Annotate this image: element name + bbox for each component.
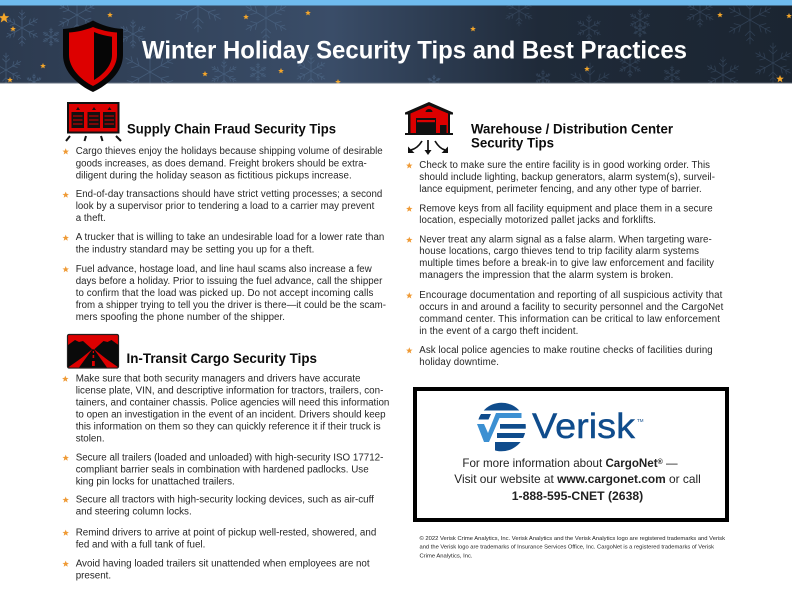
tip list: warehouse: Remove keys from all facility equipment and place them in a secure [419, 204, 713, 214]
icon: container board [66, 103, 121, 141]
heading: supply chain fraud: Supply Chain Fraud Security Tips [127, 122, 336, 136]
tip list: warehouse: house locations, cargo thieves tend to trip facility alarm systems [419, 246, 699, 257]
copyright footnote [420, 535, 725, 560]
tip list: supply chain: the industry standard may be setting you up for a theft. [76, 244, 314, 255]
tip list: supply chain: look by a supervisor prior to tendering a load to a carrier may prevent [76, 201, 375, 212]
tip list: warehouse: lance equipment, perimeter fencing, and any other type of barrier. [419, 184, 702, 195]
tip list: supply chain: days before a holiday. Prior to issuing the fuel advance, call the shipper [76, 276, 383, 287]
heading: warehouse: Warehouse / Distribution Center [471, 122, 674, 136]
contact text [454, 457, 701, 503]
tip list: warehouse: holiday downtime. [419, 357, 499, 368]
icon: shield [63, 20, 123, 92]
tip list: in-transit: present. [76, 570, 111, 582]
tip list: supply chain: A trucker that is willing to take an undesirable load for a lower rate than [76, 232, 384, 243]
tip list: supply chain: from a shipper trying to tell you the driver is there—it could be the scam- [76, 300, 386, 311]
panel: verisk contact box [415, 389, 727, 520]
contact text: ® [658, 458, 664, 466]
tip list: warehouse: Check to make sure the entire facility is in good working order. This [419, 160, 710, 171]
tip list: in-transit: Make sure that both security managers and drivers have accurate [76, 374, 361, 384]
tip list: in-transit: stolen. [76, 434, 105, 444]
tip list: in-transit: and steering column locks. [76, 506, 192, 518]
tip list: in-transit [62, 374, 389, 582]
tip list: in-transit: Remind drivers to arrive at point of pickup well-rested, showered, and [76, 528, 376, 538]
tip list: in-transit: king pin locks for unattached trailers. [76, 476, 235, 488]
tip list: in-transit: license plate, VIN, and descriptive information for tractors, trailers, con- [76, 386, 383, 396]
tip list: supply chain: Cargo thieves enjoy the holidays because shipping volume of desirable [76, 146, 383, 157]
copyright footnote: and the Verisk logo are trademarks of Insurance Services Office, Inc. CargoNet is a registered trademarks of Verisk [420, 544, 714, 550]
tip list: supply chain: diligent during the holiday season as fictitious pickups increase. [76, 170, 352, 181]
contact text: Visit our website at www.cargonet.com or call [454, 472, 701, 486]
contact text: — [663, 457, 678, 470]
icon: road [68, 334, 118, 368]
tip list: in-transit: this information on them so they can quickly reference it if their truck is [76, 422, 381, 432]
icon: warehouse [405, 102, 453, 155]
tip list: warehouse: in the event of a cargo theft incident. [419, 326, 578, 337]
tip list: supply chain: mers spoofing the phone number of the shipper. [76, 312, 285, 323]
tip list: warehouse: Ask local police agencies to make routine checks of facilities during [419, 345, 713, 356]
contact text: For more information about CargoNet [462, 457, 658, 470]
heading: in-transit: In-Transit Cargo Security Tips [126, 351, 317, 366]
tip list: supply chain: to confirm that the load was picked up. Do not accept incoming calls [76, 288, 373, 299]
panel: in-transit cargo tips [62, 334, 389, 582]
logo: verisk: TM [637, 418, 644, 423]
tip list: warehouse: multiple times before a break-in to give law enforcement and facility [419, 258, 714, 269]
panel: warehouse tips [405, 102, 724, 368]
tip list: warehouse: command center. This information can be critical to law enforcement [419, 314, 720, 325]
header banner [0, 0, 792, 107]
tip list: in-transit: Secure all tractors with high-security locking devices, such as air-cuff [76, 494, 374, 506]
logo: verisk [477, 402, 644, 452]
tip list: warehouse: occurs in and around a facility to security personnel and the CargoNet [419, 302, 724, 313]
tip list: supply chain: End-of-day transactions should have strict vetting processes; a second [76, 189, 382, 200]
tip list: warehouse: should include lighting, backup generators, alarm system(s), surveil- [419, 172, 715, 183]
tip list: in-transit: Avoid having loaded trailers sit unattended when employees are not [76, 558, 370, 570]
tip list: warehouse [406, 160, 724, 368]
tip list: warehouse: location, especially motorized pallet jacks and forklifts. [419, 215, 656, 226]
panel: supply chain fraud tips [62, 103, 386, 323]
contact text: 1-888-595-CNET (2638) [512, 489, 643, 503]
copyright footnote: © 2022 Verisk Crime Analytics, Inc. Verisk Analytics and the Verisk Analytics logo are registered trademarks and Verisk [420, 535, 725, 542]
tip list: supply chain: a theft. [76, 213, 106, 224]
tip list: in-transit: Secure all trailers (loaded and unloaded) with high-security ISO 17712- [76, 452, 383, 464]
tip list: supply chain: goods increases, as does demand. Freight brokers should be extra- [76, 158, 367, 169]
tip list: in-transit: fed and with a full tank of fuel. [76, 540, 205, 550]
tip list: warehouse: Never treat any alarm signal as a false alarm. When targeting ware- [419, 234, 712, 246]
title: Winter Holiday Security Tips and Best Practices [142, 36, 687, 64]
tip list: warehouse: Encourage documentation and reporting of all suspicious activity that [419, 290, 723, 301]
tip list: in-transit: to open an investigation in the event of an incident. Drivers should keep [76, 410, 386, 420]
tip list: supply chain: Fuel advance, hostage load, and line haul scams also increase a few [76, 264, 373, 275]
tip list: supply chain [62, 146, 386, 323]
tip list: warehouse: managers the impression that the alarm system is broken. [419, 270, 673, 281]
tip list: in-transit: tainers, and container chassis. Police agencies will need this information [76, 398, 389, 408]
copyright footnote: Crime Analytics, Inc. [420, 554, 473, 560]
tip list: in-transit: compliant barrier seals in combination with hardened padlocks. Use [76, 464, 369, 476]
logo: verisk: Verisk [532, 407, 636, 446]
panel: warehouse tips: Security Tips [471, 136, 554, 151]
